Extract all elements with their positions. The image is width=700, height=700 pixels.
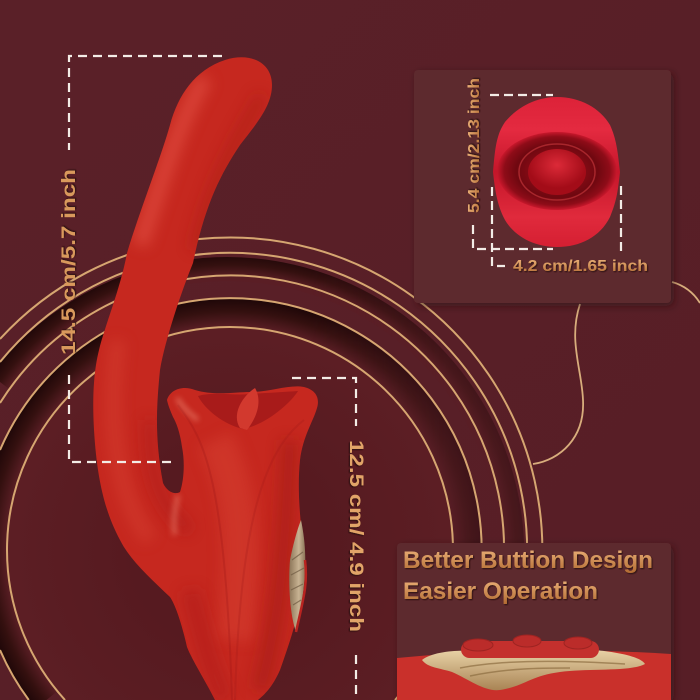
heading line two: Easier Operation xyxy=(403,578,598,605)
flower mouth xyxy=(198,388,298,430)
label: head width: 4.2 cm/1.65 inch xyxy=(513,258,648,275)
icon: head top view xyxy=(493,97,620,247)
thin gold cable xyxy=(533,282,700,464)
panel: head dimensions xyxy=(414,70,671,303)
concentric gold arcs xyxy=(0,237,542,700)
device illustration xyxy=(93,57,318,700)
button close-up xyxy=(397,635,671,700)
dimension lines: body length xyxy=(292,378,356,699)
panel: button design xyxy=(397,543,671,700)
label: overall length: 14.5 cm/5.7 inch xyxy=(59,169,80,355)
head dimension lines xyxy=(473,95,621,266)
control pill with three buttons xyxy=(461,635,599,658)
label: body length: 12.5 cm/ 4.9 inch xyxy=(345,440,366,632)
side button strip xyxy=(289,520,306,632)
label: head height: 5.4 cm/2.13 inch xyxy=(466,78,483,213)
dimension lines: overall length xyxy=(69,56,222,462)
heading line one: Better Buttion Design xyxy=(403,547,653,574)
